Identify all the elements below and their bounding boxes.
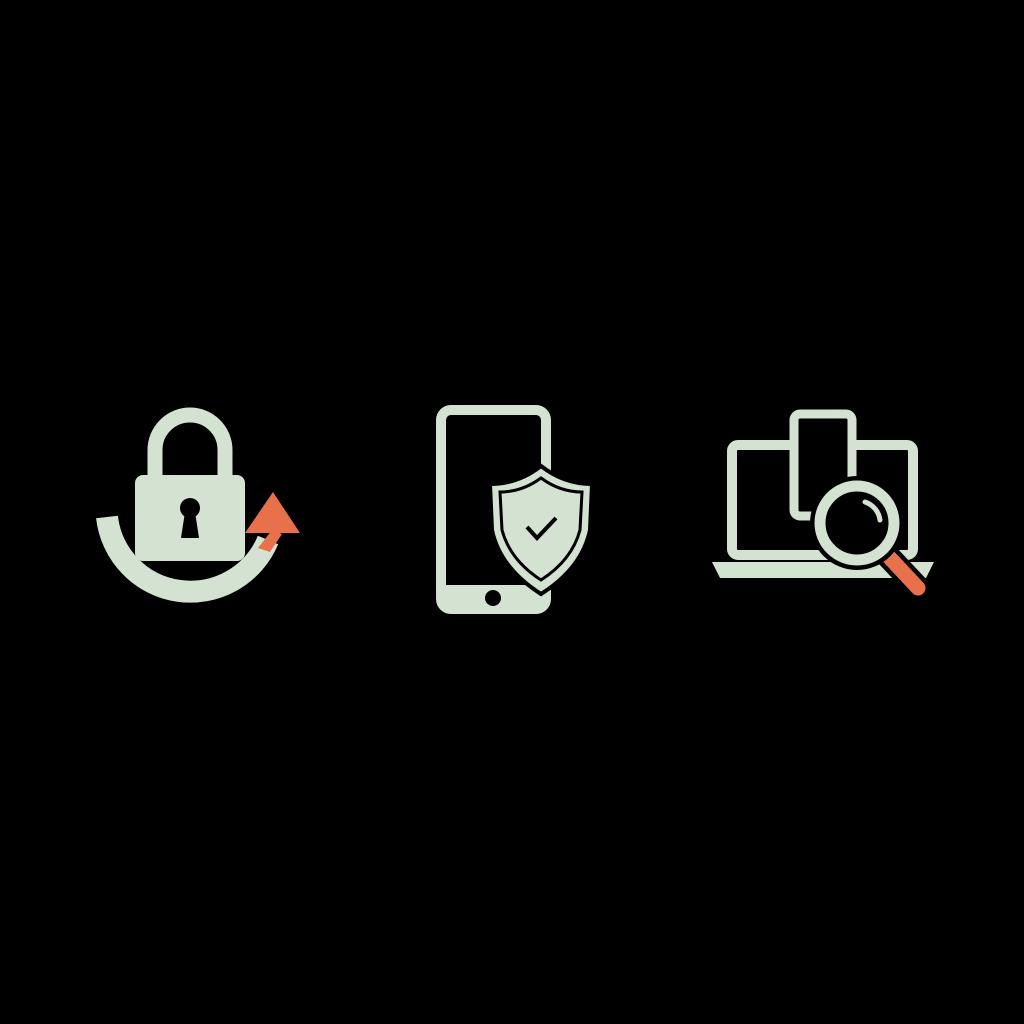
icon: lock with refresh arrow [107,415,300,592]
icon: laptop and phone with magnifier [712,414,934,590]
icon: phone with shield [441,410,592,609]
